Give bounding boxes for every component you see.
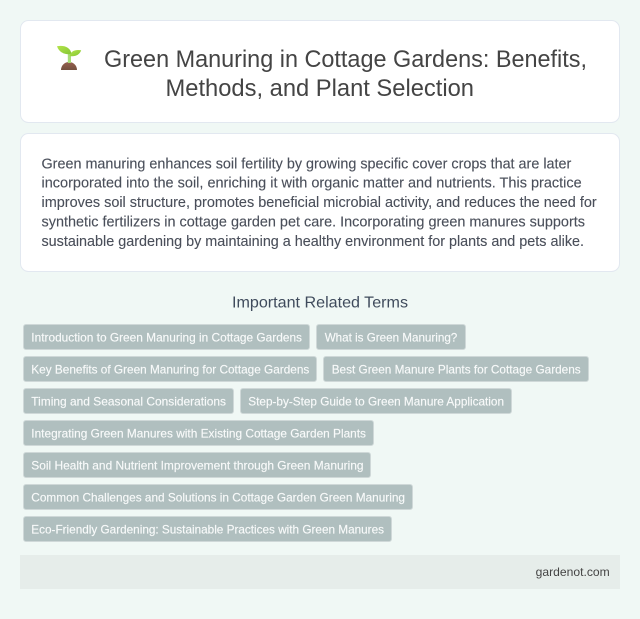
tag: best plants: Best Green Manure Plants for Cottage Gardens [332,362,581,376]
title [104,46,587,102]
tag: what is green manuring: What is Green Manuring? [325,330,458,344]
tag: what is green manuring [316,324,466,350]
text block: intro paragraph [42,156,597,250]
footer: gardenot.com [536,565,610,579]
tag: introduction: Introduction to Green Manuring in Cottage Gardens [31,330,302,344]
tag: integrating [24,420,374,446]
tag: soil health [24,452,370,478]
tag: challenges [24,484,412,510]
tag: eco-friendly [24,516,392,542]
tag: integrating: Integrating Green Manures with Existing Cottage Garden Plants [31,426,366,440]
footer [20,555,620,589]
text block: intro paragraph: synthetic fertilizers in cottage garden pet care. Incorporating green manures supports [42,215,585,231]
tag: introduction [24,324,310,350]
heading: related terms: Important Related Terms [232,294,408,311]
icon: sprout [57,46,81,70]
title: Methods, and Plant Selection [166,75,474,102]
tag: step-by-step: Step-by-Step Guide to Green Manure Application [248,394,504,408]
tag: timing [24,388,234,414]
tag: challenges: Common Challenges and Solutions in Cottage Garden Green Manuring [31,490,405,504]
text block: intro paragraph: incorporated into the soil, enriching it with organic matter and nutrients. This practice [42,176,582,192]
title: Green Manuring in Cottage Gardens: Benefits, [104,46,587,73]
tag: soil health: Soil Health and Nutrient Improvement through Green Manuring [31,458,364,472]
tag: step-by-step [240,388,512,414]
tag: key benefits [24,356,316,382]
panel: introduction [20,134,620,272]
panel: title card [20,20,620,122]
tag: key benefits: Key Benefits of Green Manuring for Cottage Gardens [31,362,309,376]
panel: related term tags [24,324,588,542]
tag: eco-friendly: Eco-Friendly Gardening: Sustainable Practices with Green Manures [31,522,384,536]
text block: intro paragraph: sustainable gardening by maintaining a healthy environment for plants and pets alike. [42,234,584,250]
text block: intro paragraph: improves soil structure, promotes beneficial microbial activity, and reduces the need for [42,195,597,211]
tag: timing: Timing and Seasonal Considerations [31,394,226,408]
text block: intro paragraph: Green manuring enhances soil fertility by growing specific cover crops that are later [42,156,571,172]
tag: best plants [324,356,588,382]
